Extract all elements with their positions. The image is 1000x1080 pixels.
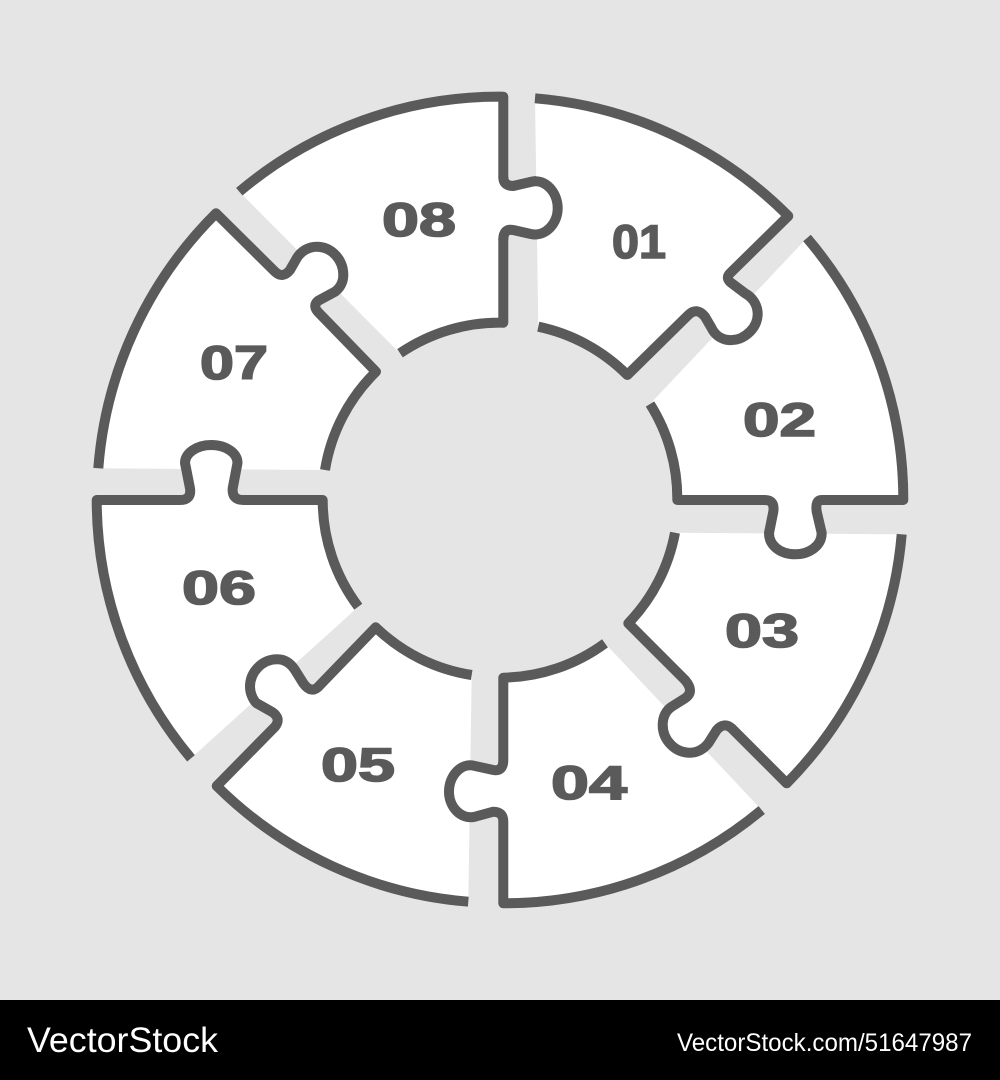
footer image id: VectorStock.com/51647987: [677, 1029, 972, 1057]
puzzle piece 05: 05: [321, 738, 395, 791]
puzzle piece 01: 01: [612, 215, 666, 268]
puzzle piece 03: [628, 533, 902, 783]
puzzle piece 02: [650, 238, 903, 554]
puzzle tab of piece 08 overlapping piece 01: [503, 177, 558, 240]
footer brand name: VectorStock: [27, 1021, 219, 1060]
puzzle piece 03: 03: [725, 604, 799, 657]
puzzle piece 06: [97, 445, 358, 758]
puzzle piece 08: 08: [382, 193, 456, 246]
puzzle piece 07: [98, 213, 376, 470]
puzzle piece 08: [239, 97, 558, 353]
puzzle piece 04: 04: [551, 756, 627, 809]
watermark footer bar: [0, 1000, 1000, 1080]
puzzle piece 04: [449, 643, 762, 903]
puzzle piece 01: [535, 98, 788, 375]
puzzle piece 02: 02: [743, 393, 816, 446]
puzzle piece 07: 07: [200, 336, 268, 389]
puzzle piece 05: [217, 627, 472, 902]
puzzle piece 06: 06: [182, 561, 256, 614]
